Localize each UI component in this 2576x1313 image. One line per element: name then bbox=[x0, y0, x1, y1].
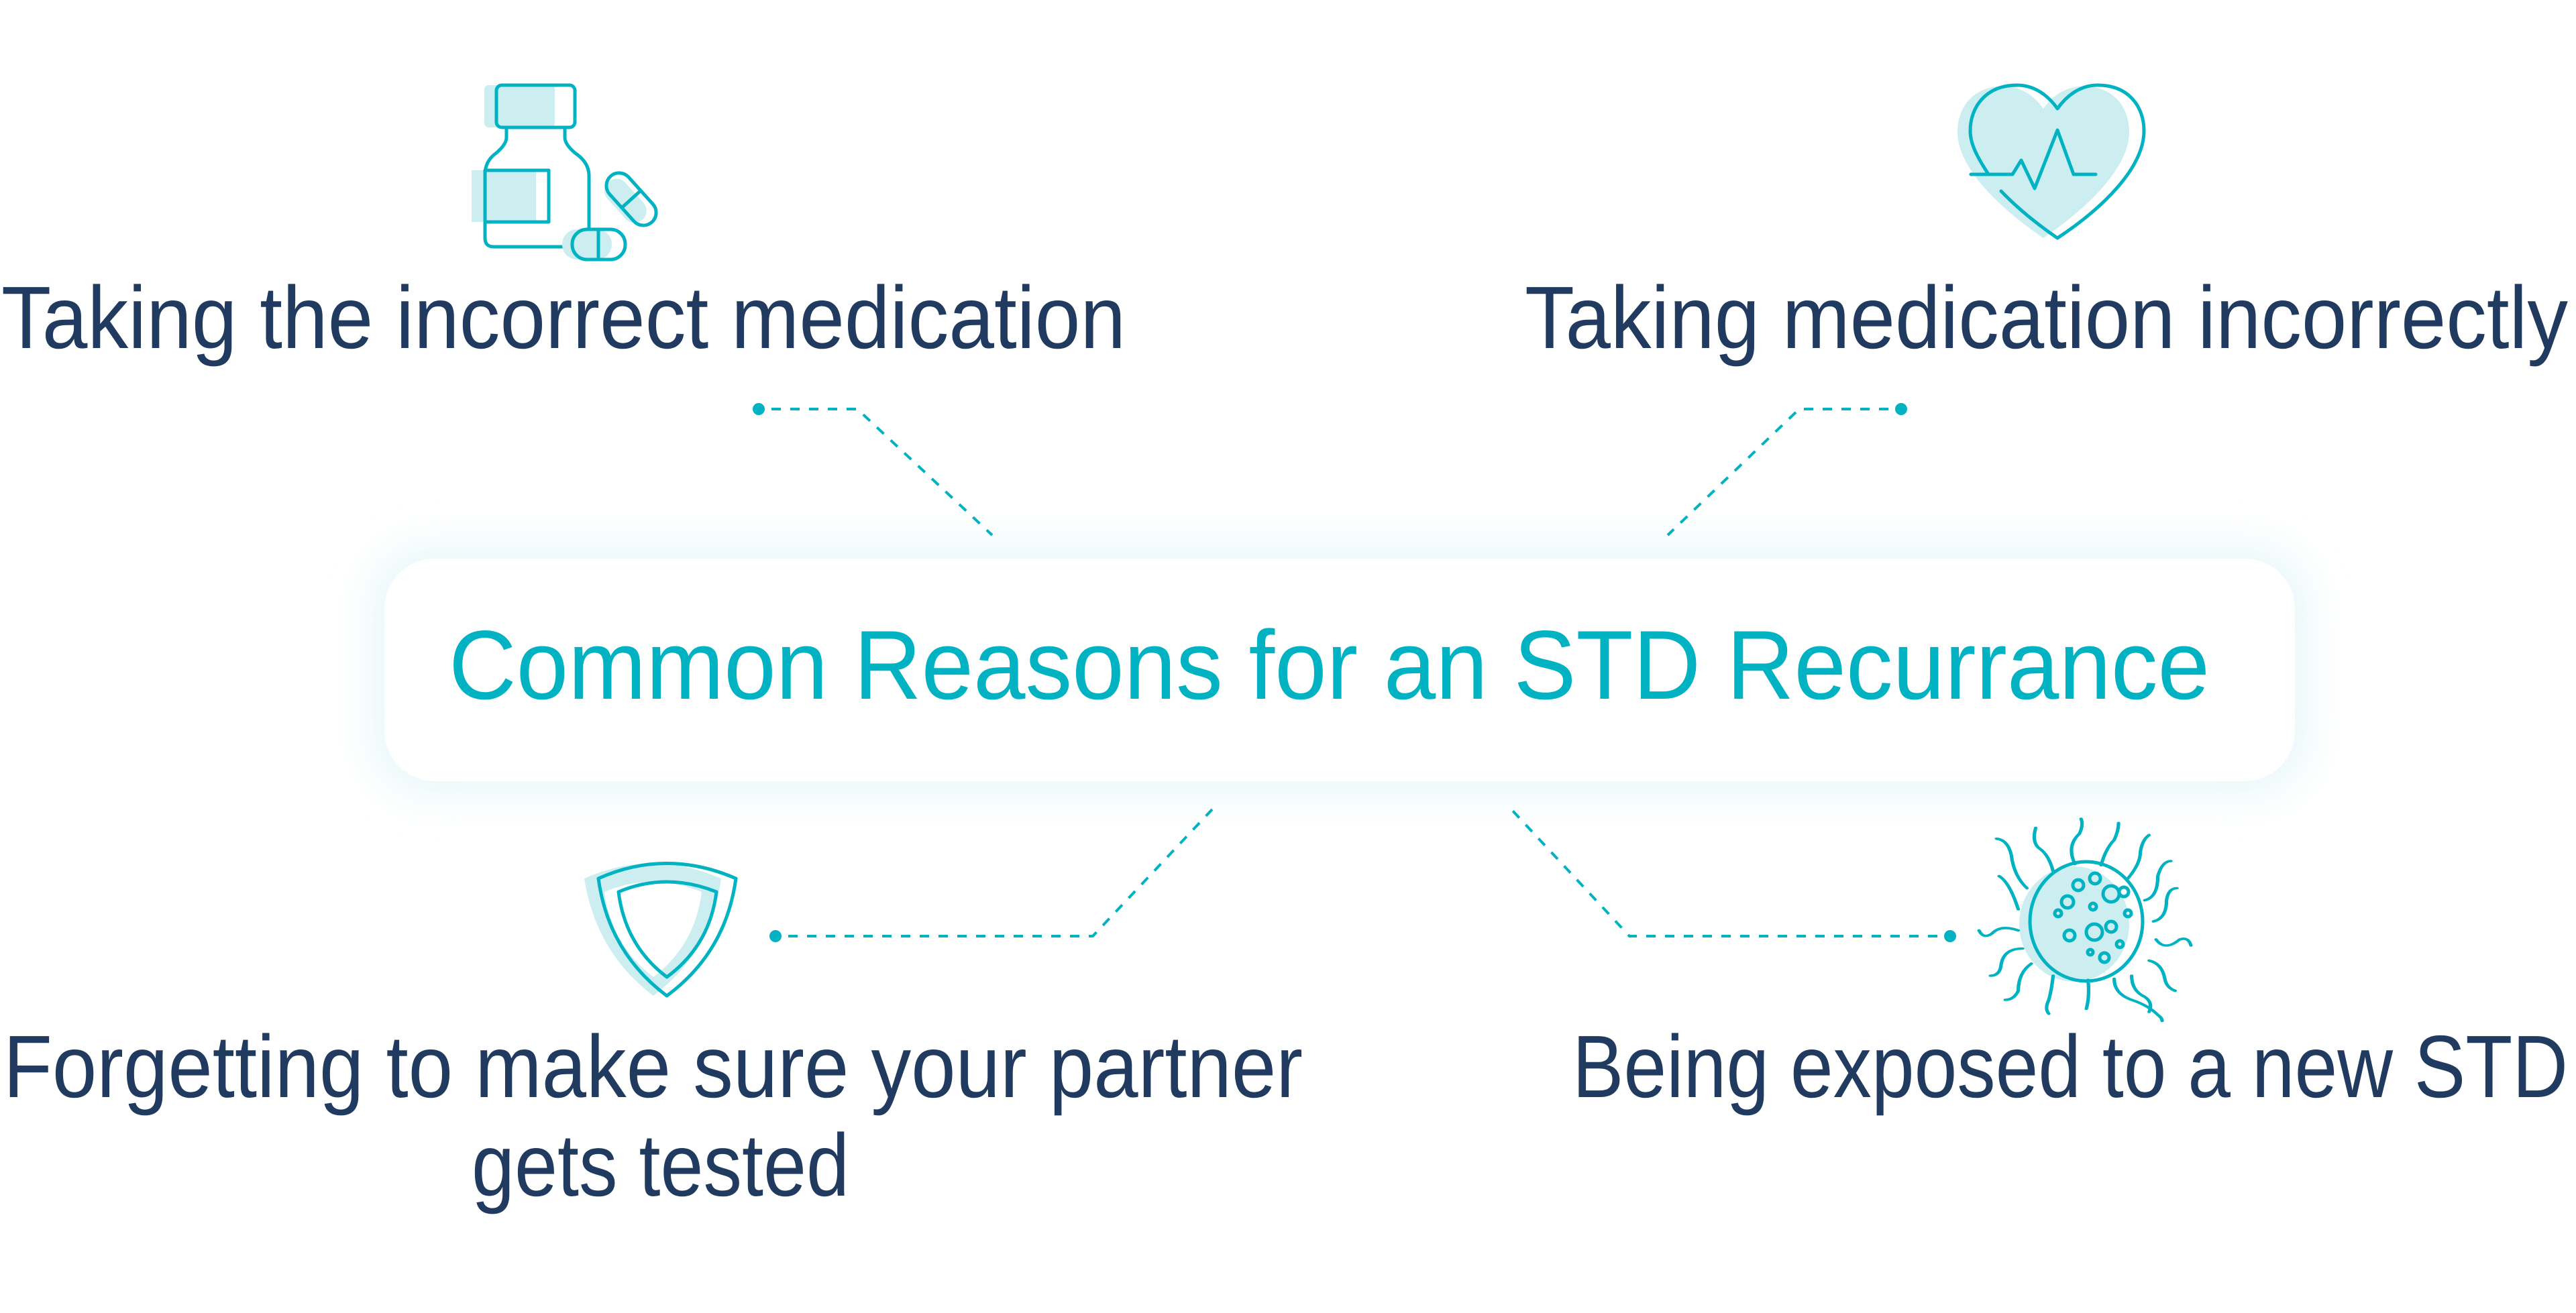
connector: top-left bbox=[753, 403, 992, 535]
icon: medicine bottle with pills bbox=[472, 85, 661, 260]
text: forgetting partner tested: gets tested bbox=[472, 1116, 849, 1214]
icon: heart with pulse bbox=[1957, 85, 2144, 238]
connector: bottom-right bbox=[1511, 809, 1956, 942]
connector: bottom-left bbox=[769, 809, 1212, 942]
icon: shield bbox=[584, 864, 736, 996]
title box bbox=[371, 545, 2308, 795]
text: forgetting partner tested: Forgetting to make sure your partner bbox=[3, 1017, 1303, 1116]
connector: top-right bbox=[1668, 403, 1907, 535]
text: forgetting partner tested bbox=[3, 1017, 1303, 1214]
text: taking the incorrect medication: Taking the incorrect medication bbox=[1, 268, 1126, 367]
title: Common Reasons for an STD Recurrance bbox=[449, 610, 2210, 720]
icon: virus bbox=[1979, 819, 2191, 1021]
